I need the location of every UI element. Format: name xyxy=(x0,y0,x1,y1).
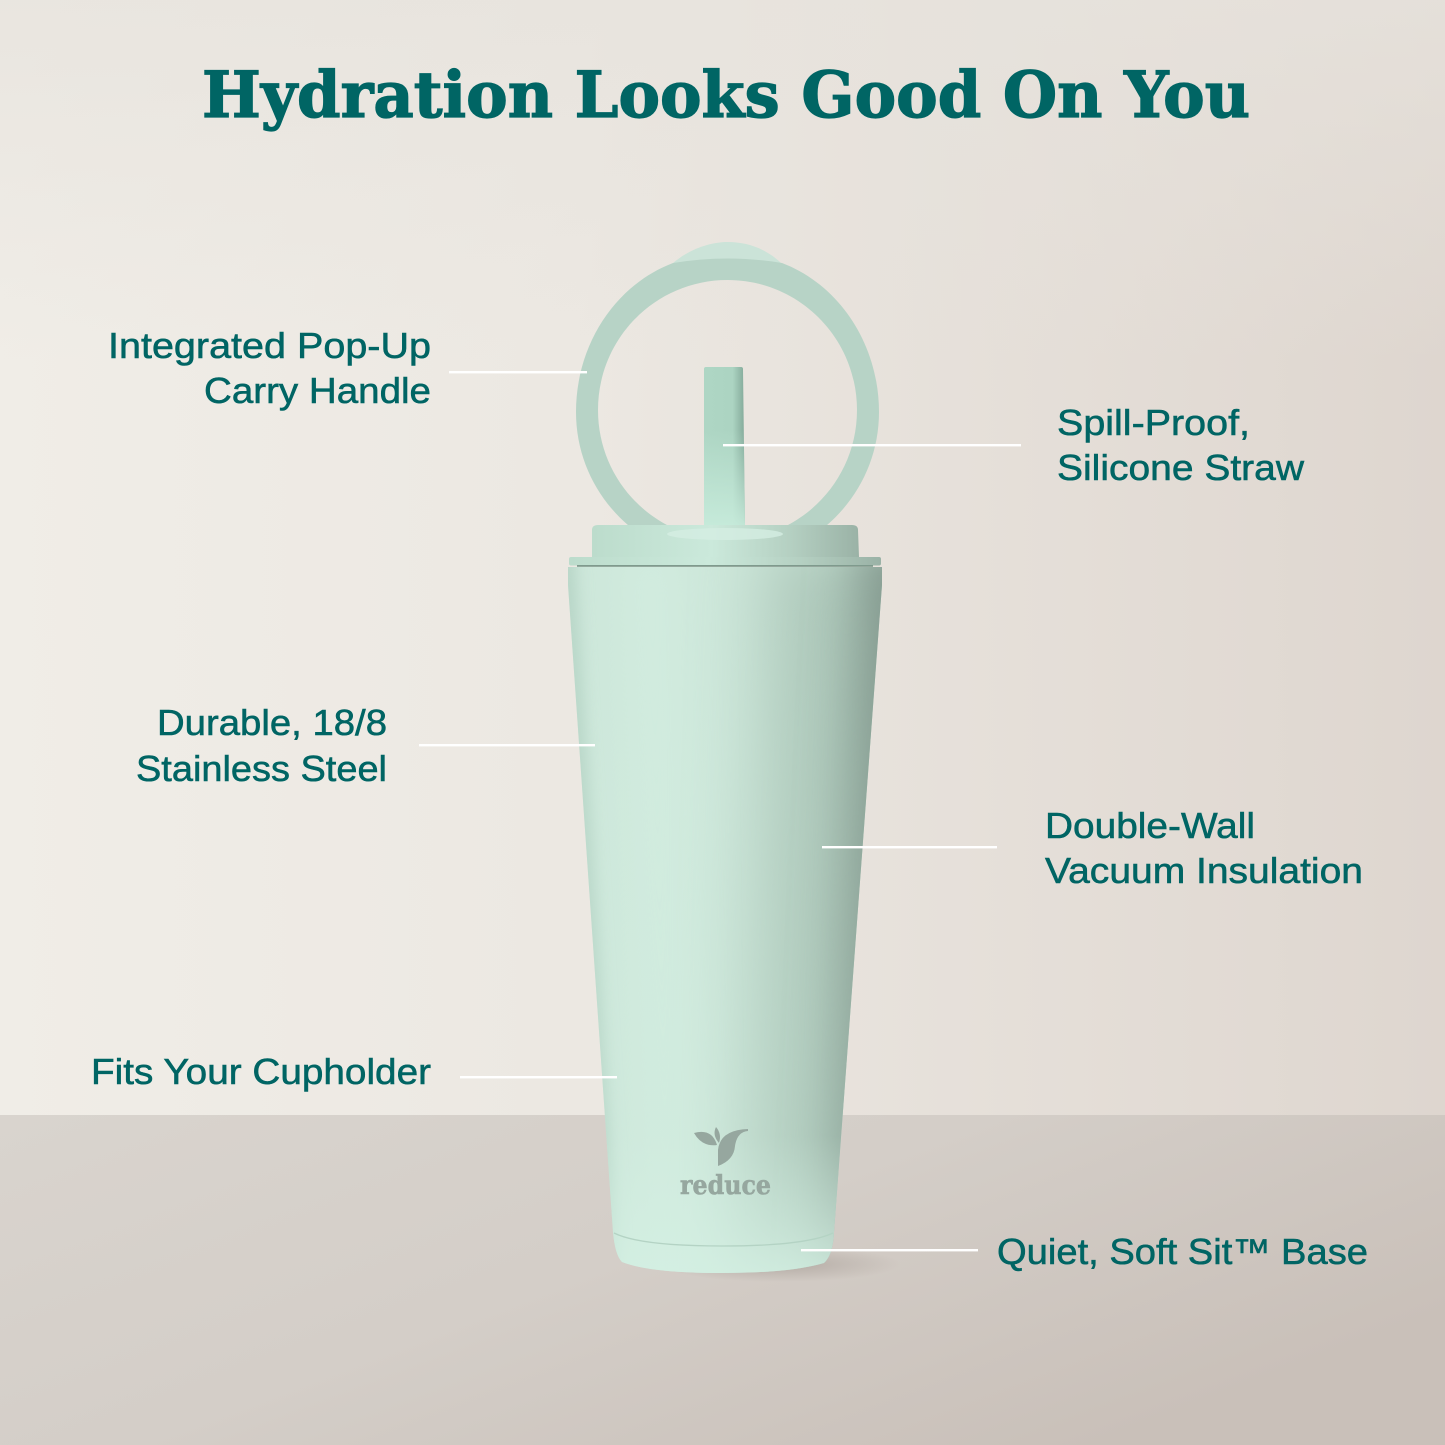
callout: stainless steel xyxy=(136,702,595,789)
callout label: Integrated Pop-Up xyxy=(108,325,431,366)
body shading: left edge xyxy=(568,567,612,1190)
callout label xyxy=(1045,805,1363,891)
leader line xyxy=(460,1076,617,1078)
tumbler product illustration xyxy=(568,242,882,1278)
leader line xyxy=(723,444,1021,446)
callout label: Silicone Straw xyxy=(1057,447,1305,488)
callout label xyxy=(1057,402,1305,488)
carry handle ring xyxy=(576,242,879,525)
leader line xyxy=(801,1249,978,1251)
body shading: midtone xyxy=(732,567,882,1250)
callout: straw xyxy=(723,402,1305,488)
callout label xyxy=(108,325,431,411)
logo leaves icon xyxy=(694,1127,748,1166)
callout: insulation xyxy=(822,805,1363,891)
leader line xyxy=(449,371,587,373)
reduce logo xyxy=(680,1127,771,1201)
callout label: Spill-Proof, xyxy=(1057,402,1250,443)
wall top tone xyxy=(0,0,1445,360)
tumbler contact shadow xyxy=(660,1246,900,1282)
background wall xyxy=(0,0,1445,1116)
body shading: right shadow xyxy=(812,567,882,1258)
leader line xyxy=(419,744,595,746)
leader line xyxy=(822,846,997,848)
tumbler lid xyxy=(569,525,881,567)
stainless steel tumbler body xyxy=(568,567,882,1273)
callout label: Carry Handle xyxy=(204,370,431,411)
callout label: Fits Your Cupholder xyxy=(91,1051,431,1092)
callout label xyxy=(136,702,387,789)
body shading: left highlight xyxy=(620,540,690,1300)
silicone straw xyxy=(704,367,745,525)
callout label: Stainless Steel xyxy=(136,748,387,789)
floor surface xyxy=(0,1115,1445,1445)
callout label: Durable, 18/8 xyxy=(157,702,387,743)
callout label: Quiet, Soft Sit™ Base xyxy=(997,1231,1368,1272)
callout: carry handle xyxy=(108,325,587,411)
logo wordmark: reduce xyxy=(680,1171,771,1201)
callout label: Vacuum Insulation xyxy=(1045,850,1363,891)
callout label: Double-Wall xyxy=(1045,805,1255,846)
title: Hydration Looks Good On You xyxy=(202,58,1250,133)
